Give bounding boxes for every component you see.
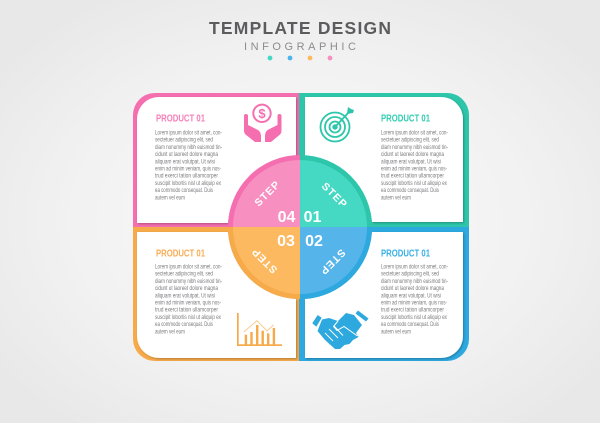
teal panel text: sectetuer adipiscing elit, sed (381, 137, 439, 144)
teal panel text: ea commodo consequat. Duis (381, 187, 439, 194)
title dots (268, 56, 332, 60)
teal panel text: diam nonummy nibh euismod tin- (381, 144, 448, 151)
teal panel text: enim ad minim veniam, quis nos- (381, 166, 447, 172)
teal panel text: trud exerci tation ullamcorper (381, 173, 444, 180)
number 04: 04 (278, 209, 296, 226)
orange panel text: aliquam erat volutpat. Ut wisi (155, 292, 215, 299)
orange panel text: cidunt ut laoreet dolore magna (155, 285, 218, 292)
pink panel text: trud exerci tation ullamcorper (155, 173, 218, 180)
pink panel text: Lorem ipsum dolor sit amet, con- (155, 130, 222, 136)
step label blue: STEP (317, 246, 348, 277)
pink panel text: enim ad minim veniam, quis nos- (155, 166, 221, 172)
orange panel heading: PRODUCT 01 (156, 248, 205, 260)
pink panel text: diam nonummy nibh euismod tin- (155, 144, 222, 151)
blue panel text: sectetuer adipiscing elit, sed (381, 271, 439, 278)
quadrant: pink (228, 155, 300, 227)
orange panel card (137, 232, 296, 358)
orange panel text: diam nonummy nibh euismod tin- (155, 278, 222, 285)
icon: handshake (312, 310, 368, 349)
panel: product 04 pink (133, 93, 300, 227)
blue panel text: suscipit lobortis nisl ut aliquip ex (381, 314, 448, 321)
panel: product 03 orange (133, 227, 300, 361)
teal panel text: aliquam erat volutpat. Ut wisi (381, 158, 441, 165)
orange panel text: suscipit lobortis nisl ut aliquip ex (155, 314, 222, 321)
number 02: 02 (305, 233, 323, 250)
center circle (228, 155, 372, 299)
blue panel text: enim ad minim veniam, quis nos- (381, 300, 447, 306)
blue panel text: autem vel eum (381, 328, 411, 335)
teal panel text: suscipit lobortis nisl ut aliquip ex (381, 180, 448, 187)
icon: hands holding coin (244, 105, 282, 142)
subtitle: INFOGRAPHIC (244, 41, 356, 53)
pink panel text: autem vel eum (155, 194, 185, 201)
teal panel card (305, 97, 463, 222)
panel: product 02 blue (299, 227, 469, 361)
icon: target with arrow (320, 107, 354, 142)
pink panel card (137, 97, 296, 223)
pink panel text: cidunt ut laoreet dolore magna (155, 151, 218, 158)
icon: bar chart with trend line (237, 313, 282, 346)
step label orange: STEP (249, 245, 280, 276)
quadrant: orange (228, 227, 300, 299)
orange panel text: sectetuer adipiscing elit, sed (155, 271, 213, 278)
pink panel heading: PRODUCT 01 (156, 114, 205, 124)
blue panel text: aliquam erat volutpat. Ut wisi (381, 292, 441, 299)
orange panel text: enim ad minim veniam, quis nos- (155, 300, 221, 306)
blue panel text: trud exerci tation ullamcorper (381, 307, 444, 314)
number 03: 03 (277, 233, 295, 250)
blue panel text (381, 264, 448, 335)
teal panel text: cidunt ut laoreet dolore magna (381, 151, 444, 158)
orange panel text: trud exerci tation ullamcorper (155, 307, 218, 314)
orange panel text (155, 264, 222, 335)
pink panel text: suscipit lobortis nisl ut aliquip ex (155, 180, 222, 187)
pink panel text: ea commodo consequat. Duis (155, 187, 213, 194)
blue panel text: diam nonummy nibh euismod tin- (381, 278, 448, 285)
quadrant: blue (300, 227, 372, 299)
blue panel text: ea commodo consequat. Duis (381, 321, 439, 328)
pink panel text: aliquam erat volutpat. Ut wisi (155, 158, 215, 165)
blue panel card (305, 232, 463, 358)
blue panel text: Lorem ipsum dolor sit amet, con- (381, 264, 448, 270)
pink panel text (155, 130, 222, 201)
orange panel text: Lorem ipsum dolor sit amet, con- (155, 264, 222, 270)
icon: hands holding coin: $ (258, 106, 266, 121)
orange panel text: ea commodo consequat. Duis (155, 321, 213, 328)
orange panel text: autem vel eum (155, 328, 185, 335)
teal panel text: Lorem ipsum dolor sit amet, con- (381, 130, 448, 136)
blue panel text: cidunt ut laoreet dolore magna (381, 285, 444, 292)
pink panel text: sectetuer adipiscing elit, sed (155, 137, 213, 144)
blue panel heading: PRODUCT 01 (381, 248, 430, 260)
step label teal: STEP (319, 180, 350, 211)
teal panel heading: PRODUCT 01 (381, 114, 430, 124)
title: TEMPLATE DESIGN (209, 18, 391, 38)
quadrant: teal (300, 155, 372, 227)
panel: product 01 teal (299, 93, 469, 227)
teal panel text (381, 130, 448, 201)
step label pink: STEP (252, 178, 283, 209)
number 01: 01 (304, 209, 322, 226)
teal panel text: autem vel eum (381, 194, 411, 201)
